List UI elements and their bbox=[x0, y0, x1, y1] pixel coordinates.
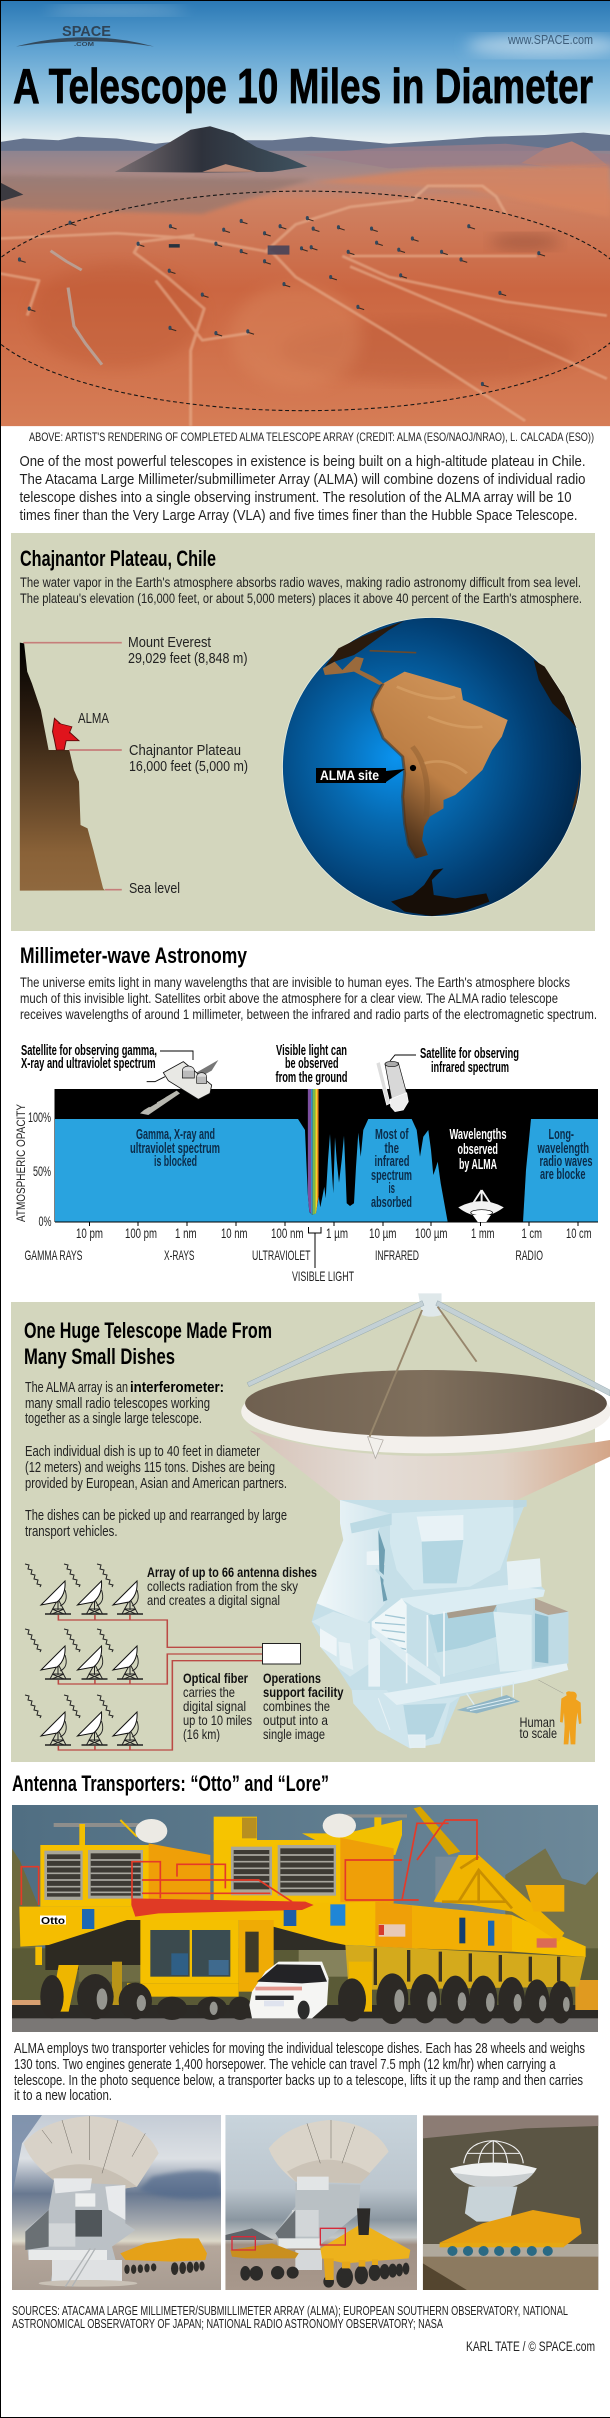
sources: ASTRONOMICAL OBSERVATORY OF JAPAN; NATIONAL RADIO ASTRONOMY OBSERVATORY; NASA bbox=[12, 2317, 443, 2331]
y axis values: 100% bbox=[28, 1109, 51, 1125]
label: operations support facility: support facility bbox=[263, 1684, 344, 1700]
label: human to scale bbox=[520, 1714, 557, 1741]
y axis values bbox=[28, 1109, 52, 1229]
label: optical fiber: Optical fiber bbox=[183, 1670, 248, 1686]
x axis wavelength values: 10 cm bbox=[566, 1225, 592, 1241]
spectrum band names: RADIO bbox=[516, 1247, 543, 1263]
chart note: infrared absorbed: Most of bbox=[375, 1127, 409, 1143]
x axis wavelength values: 100 µm bbox=[415, 1225, 448, 1241]
elevation profile bbox=[20, 643, 122, 891]
chart note: infrared absorbed: absorbed bbox=[371, 1195, 412, 1211]
photo sequence: step 3 bbox=[423, 2115, 598, 2290]
spectrum band names: ULTRAVIOLET bbox=[252, 1247, 311, 1263]
heading: Antenna Transporters: Antenna Transporters: “Otto” and “Lore” bbox=[12, 1771, 329, 1796]
callout: ALMA site: ALMA site bbox=[320, 767, 379, 783]
interferometer text: The ALMA array is an bbox=[25, 1380, 128, 1396]
intro paragraph bbox=[20, 454, 586, 524]
heading: One Huge Telescope: Many Small Dishes bbox=[24, 1344, 175, 1369]
photo sequence: step 1 bbox=[12, 2115, 221, 2290]
label: optical fiber: digital signal bbox=[183, 1698, 246, 1714]
human silhouette bbox=[560, 1691, 581, 1744]
callout: infrared satellite label bbox=[390, 1046, 519, 1076]
label: operations support facility: combines the bbox=[263, 1698, 330, 1714]
antenna array icons bbox=[25, 1564, 143, 1745]
interferometer text: many small radio telescopes working bbox=[25, 1396, 210, 1412]
interferometer text: Each individual dish is up to 40 feet in diameter bbox=[25, 1444, 260, 1460]
label: optical fiber: (16 km) bbox=[183, 1726, 220, 1742]
callout: infrared satellite label: Satellite for observing bbox=[420, 1046, 519, 1062]
label: antenna array: collects radiation from the sky bbox=[147, 1578, 298, 1594]
visible light bracket bbox=[308, 1227, 321, 1268]
x axis wavelength values: 1 cm bbox=[522, 1225, 542, 1241]
interferometer text: together as a single large telescope. bbox=[25, 1411, 202, 1427]
x axis wavelength values: 1 mm bbox=[471, 1225, 494, 1241]
chart note: infrared absorbed: is bbox=[388, 1181, 395, 1197]
label: human to scale: to scale bbox=[520, 1725, 557, 1741]
axis label: atmospheric opacity: ATMOSPHERIC OPACITY bbox=[16, 1104, 28, 1222]
callout: gamma satellite label: X-ray and ultraviolet spectrum bbox=[21, 1056, 156, 1072]
spectrum band names: GAMMA RAYS bbox=[24, 1247, 82, 1263]
illustration: ALMA antenna pedestal bbox=[312, 1500, 581, 1748]
chart note: wavelengths observed by ALMA: by ALMA bbox=[459, 1157, 497, 1173]
chart note: gamma blocked: ultraviolet spectrum bbox=[130, 1141, 220, 1157]
label: optical fiber bbox=[183, 1670, 252, 1742]
satellite: gamma, X-ray and UV bbox=[140, 1060, 218, 1115]
callout: visible light: be observed bbox=[285, 1056, 338, 1072]
x axis wavelength values bbox=[76, 1225, 592, 1241]
panel: One Huge Telescope bbox=[11, 1293, 610, 1762]
chart note: infrared absorbed: the bbox=[384, 1141, 399, 1157]
label: antenna array bbox=[147, 1564, 317, 1608]
interferometer text: (12 meters) and weighs 115 tons. Dishes are being bbox=[25, 1460, 275, 1476]
section: Millimeter-wave Astronomy bbox=[16, 943, 598, 1284]
x axis wavelength values: 100 nm bbox=[271, 1225, 304, 1241]
spectrum band names: INFRARED bbox=[375, 1247, 419, 1263]
spectrum band names: X-RAYS bbox=[164, 1247, 194, 1263]
section description bbox=[20, 975, 597, 1022]
spectrum band names: VISIBLE LIGHT bbox=[292, 1268, 354, 1284]
label: operations support facility: single image bbox=[263, 1726, 325, 1742]
callout: visible light: Visible light can bbox=[276, 1043, 347, 1059]
heading: One Huge Telescope bbox=[24, 1318, 272, 1369]
interferometer text: provided by European, Asian and American partners. bbox=[25, 1476, 287, 1492]
heading: Chajnantor Plateau, Chile: Chajnantor Plateau, Chile bbox=[20, 546, 216, 571]
chart note: infrared absorbed: spectrum bbox=[371, 1168, 412, 1184]
elevation labels: 29,029 feet (8,848 m) bbox=[128, 651, 248, 667]
panel: Chajnantor Plateau bbox=[11, 533, 595, 931]
chart: atmospheric opacity bbox=[54, 1089, 598, 1226]
callout: gamma satellite label bbox=[21, 1043, 193, 1072]
label: antenna array: and creates a digital signal bbox=[147, 1592, 280, 1608]
elevation labels: Mount Everest bbox=[128, 635, 211, 651]
callout: ALMA site bbox=[316, 765, 416, 783]
logo: SPACE.com: .COM bbox=[74, 42, 94, 48]
label: optical fiber: carries the bbox=[183, 1684, 235, 1700]
site url: www.SPACE.com bbox=[507, 32, 593, 47]
x axis wavelength values: 1 nm bbox=[175, 1225, 196, 1241]
chart note: wavelengths observed by ALMA: Wavelengths bbox=[450, 1127, 506, 1143]
heading: One Huge Telescope: One Huge Telescope Made From bbox=[24, 1318, 272, 1343]
x axis wavelength values: 1 µm bbox=[326, 1225, 348, 1241]
operations support box bbox=[262, 1644, 300, 1664]
elevation labels: Chajnantor Plateau bbox=[129, 743, 241, 759]
satellite: infrared bbox=[376, 1061, 408, 1112]
label: operations support facility bbox=[263, 1670, 344, 1742]
chart note: radio waves blocked bbox=[537, 1127, 592, 1183]
label on vehicle: Otto: Otto bbox=[41, 1916, 65, 1927]
sources bbox=[12, 2304, 568, 2331]
chart note: infrared absorbed bbox=[371, 1127, 412, 1211]
transporter description: it to a new location. bbox=[14, 2088, 112, 2104]
chart note: wavelengths observed by ALMA: observed bbox=[458, 1142, 498, 1158]
icon: ALMA dish on chart bbox=[458, 1190, 504, 1222]
logo: SPACE.com bbox=[16, 23, 154, 48]
chart note: gamma blocked: Gamma, X-ray and bbox=[136, 1127, 215, 1143]
chart note: radio waves blocked: Long- bbox=[548, 1127, 574, 1143]
heading: Millimeter-wave Astronomy: Millimeter-wave Astronomy bbox=[20, 943, 248, 968]
callout: visible light: from the ground bbox=[276, 1070, 348, 1086]
photo sequence: step 2 bbox=[225, 2115, 417, 2290]
elevation labels: Sea level bbox=[129, 881, 180, 897]
label: antenna array: Array of up to 66 antenna dishes bbox=[147, 1564, 317, 1580]
elevation labels bbox=[78, 635, 248, 897]
callout: visible light bbox=[276, 1043, 348, 1086]
elevation labels: 16,000 feet (5,000 m) bbox=[129, 759, 248, 775]
y axis values: 50% bbox=[33, 1163, 51, 1179]
x axis wavelength values: 10 pm bbox=[76, 1225, 103, 1241]
callout: gamma satellite label: Satellite for observing gamma, bbox=[21, 1043, 157, 1059]
spectrum band names bbox=[24, 1247, 543, 1284]
label: human to scale: Human bbox=[520, 1714, 555, 1730]
diagram: fiber wiring bbox=[58, 1615, 263, 1750]
y axis values: 0% bbox=[38, 1213, 52, 1229]
hero photo: ALMA array on plateau bbox=[0, 0, 610, 428]
interferometer text: interferometer: bbox=[130, 1379, 224, 1396]
globe with South America bbox=[282, 618, 582, 916]
chart note: wavelengths observed by ALMA bbox=[450, 1127, 506, 1173]
label: optical fiber: up to 10 miles bbox=[183, 1712, 252, 1728]
elevation labels: ALMA bbox=[78, 711, 109, 727]
x axis wavelength values: 100 pm bbox=[125, 1225, 157, 1241]
interferometer text: transport vehicles. bbox=[25, 1524, 118, 1540]
chart note: radio waves blocked: are blocke bbox=[540, 1167, 586, 1183]
chart note: gamma blocked bbox=[130, 1127, 220, 1170]
label: operations support facility: output into a bbox=[263, 1712, 328, 1728]
interferometer text: The dishes can be picked up and rearranged by large bbox=[25, 1508, 287, 1524]
illustration: ALMA antenna dish bbox=[241, 1293, 610, 1502]
interferometer text bbox=[25, 1379, 287, 1540]
x axis wavelength values: 10 µm bbox=[369, 1225, 396, 1241]
chart note: infrared absorbed: infrared bbox=[374, 1154, 410, 1170]
callout: infrared satellite label: infrared spectrum bbox=[431, 1060, 509, 1076]
logo: SPACE.com: SPACE bbox=[62, 23, 111, 40]
panel description bbox=[20, 575, 582, 606]
x axis wavelength values: 10 nm bbox=[221, 1225, 248, 1241]
chart note: gamma blocked: is blocked bbox=[154, 1154, 197, 1170]
label: operations support facility: Operations bbox=[263, 1670, 321, 1686]
photo: transporter Otto bbox=[12, 1805, 598, 2032]
transporter description bbox=[14, 2041, 585, 2104]
